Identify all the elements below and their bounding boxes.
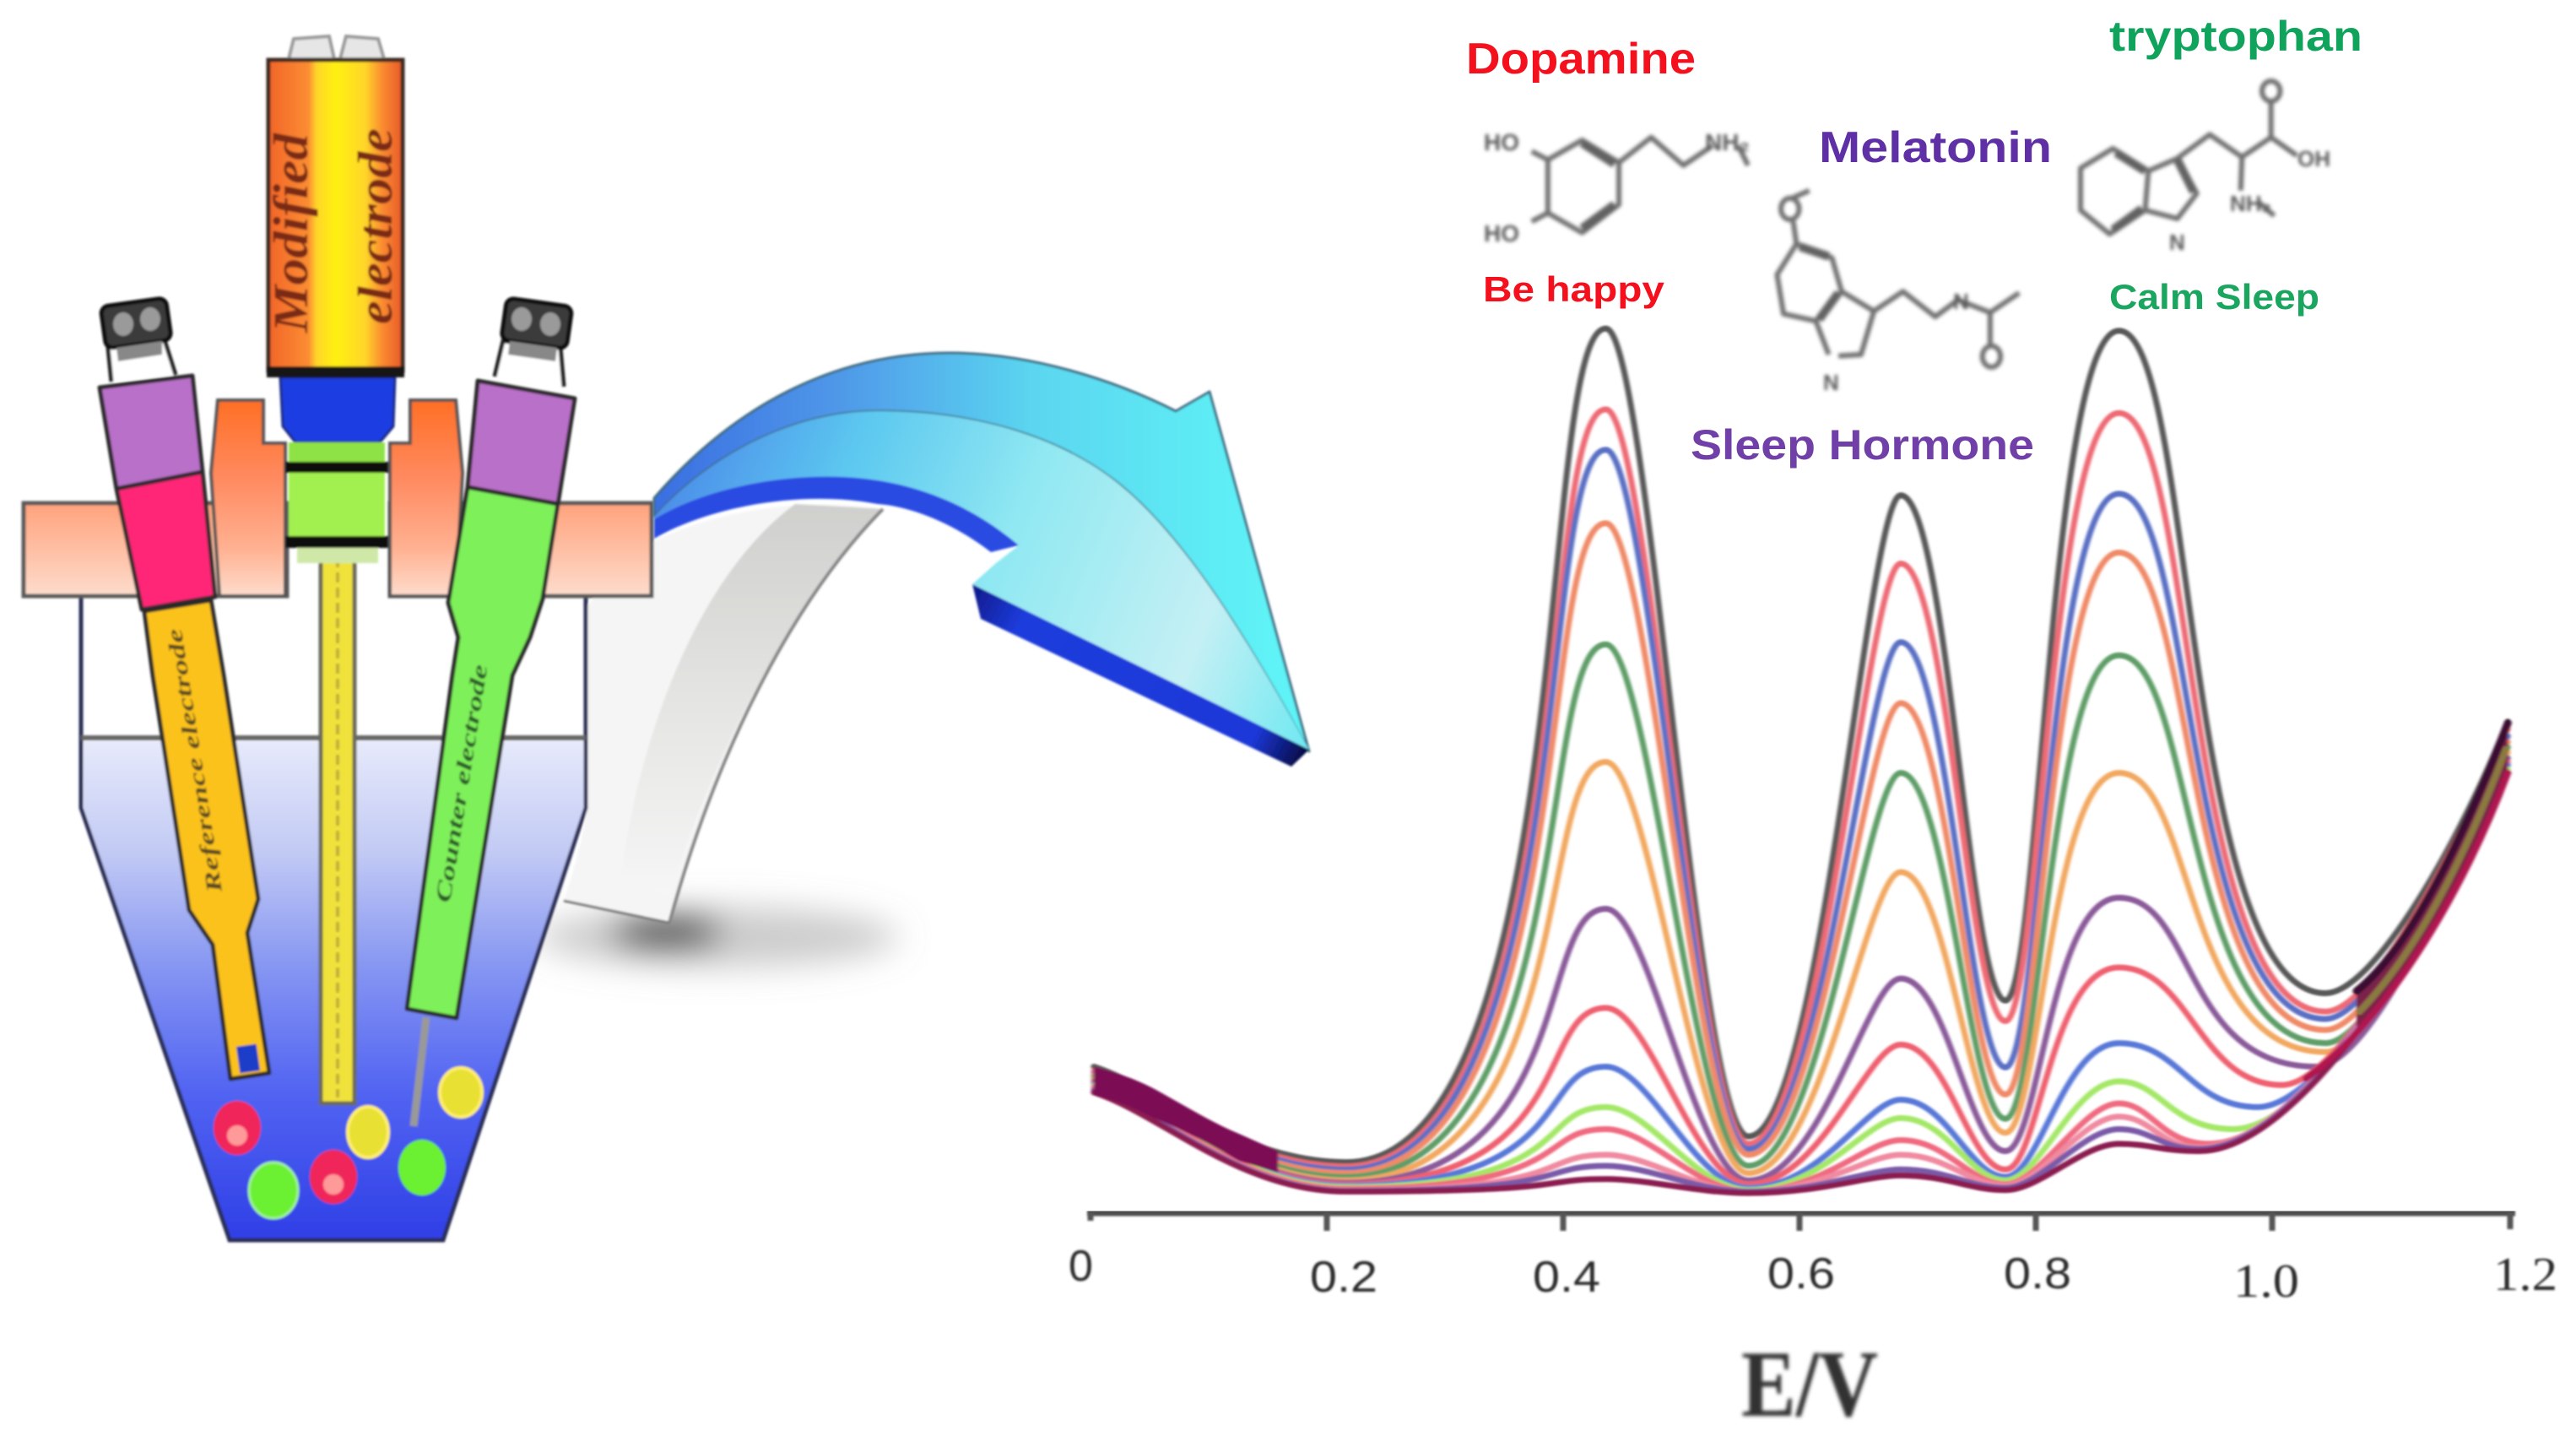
axis tick labels: 0.4 [1533, 1253, 1600, 1302]
reference label: Reference electrode [162, 627, 227, 896]
melatonin structure: N [1823, 370, 1839, 395]
melatonin name: Melatonin [1819, 123, 2052, 172]
axis tick labels [1069, 1242, 2557, 1308]
dopamine structure: NH₂ [1705, 129, 1750, 155]
counter label: Counter electrode [430, 663, 493, 904]
dopamine structure: HO [1484, 220, 1519, 247]
electrochemical cell diagram [24, 36, 899, 1240]
axis tick labels: 0.2 [1310, 1253, 1377, 1302]
modified electrode body [263, 36, 404, 377]
tryptophan name: tryptophan [2109, 13, 2362, 60]
axis tick labels: 1.0 [2233, 1255, 2299, 1308]
dopamine effect: Be happy [1483, 269, 1665, 309]
voltammetry chart [1069, 328, 2557, 1437]
central rod [321, 549, 354, 1103]
melatonin structure: N [1953, 289, 1969, 314]
reference electrode [100, 298, 269, 1079]
tryptophan structure: N [2169, 230, 2185, 255]
tryptophan structure: NH₂ [2230, 191, 2271, 216]
lid collars [211, 400, 463, 596]
terminal [495, 298, 572, 387]
curved arrow grey back face [564, 504, 883, 923]
melatonin structure [1777, 191, 2019, 395]
tryptophan structure [2081, 81, 2330, 255]
dopamine label group [1466, 35, 1750, 309]
melatonin effect: Sleep Hormone [1691, 421, 2034, 469]
axis tick labels: 0.6 [1767, 1249, 1835, 1298]
modified electrode connector [280, 377, 395, 563]
melatonin label group [1691, 123, 2052, 469]
curved blue arrow [654, 353, 1309, 767]
curved arrow back shadow [536, 907, 899, 967]
axis title: E/V [1741, 1332, 1878, 1437]
arrow upper face [654, 353, 1309, 751]
vessel with blue solution [81, 596, 586, 1240]
axis tick labels: 0.8 [2004, 1249, 2071, 1298]
axis tick labels: 0 [1069, 1242, 1093, 1291]
terminal [100, 298, 176, 382]
arrow inner face [654, 411, 1309, 750]
counter electrode [407, 298, 575, 1126]
cell lid plate [24, 503, 652, 596]
arrow dark inner edge [654, 477, 1019, 552]
dopamine name: Dopamine [1466, 35, 1696, 84]
arrow head thickness [972, 584, 1309, 767]
x axis [1087, 1212, 2515, 1231]
tryptophan structure: OH [2297, 146, 2330, 171]
dopamine structure: HO [1484, 129, 1519, 155]
voltammogram curves [1094, 328, 2508, 1193]
analyte molecules in solution [214, 1068, 482, 1218]
tryptophan label group [2081, 13, 2362, 317]
tryptophan effect: Calm Sleep [2109, 277, 2319, 317]
electrode label: Modified [263, 133, 318, 333]
electrode label second word: electrode [348, 128, 403, 324]
axis tick labels: 1.2 [2493, 1249, 2557, 1301]
dopamine structure [1484, 129, 1750, 247]
